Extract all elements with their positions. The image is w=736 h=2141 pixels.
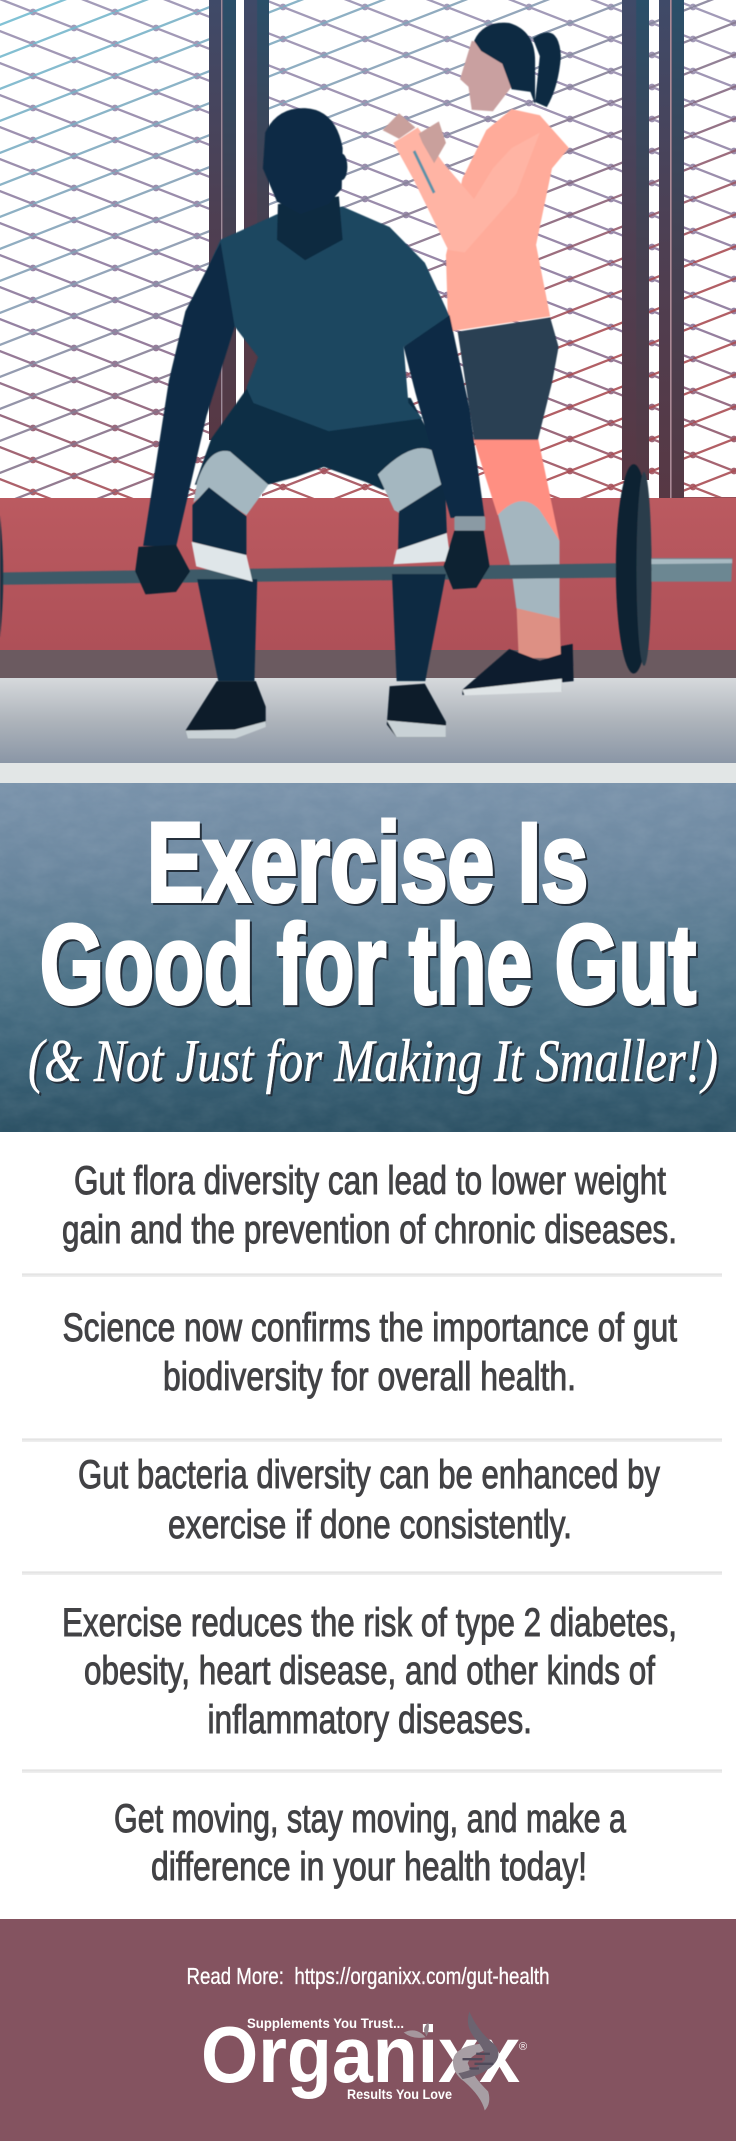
- man shorts: [195, 383, 446, 490]
- point 5: difference in your health today!: [151, 1845, 587, 1889]
- man right thigh: [378, 448, 445, 513]
- logo: Organixx: Supplements You Trust...: [247, 2016, 404, 2031]
- man calf bands: [192, 533, 451, 582]
- woman ankle: [516, 602, 561, 658]
- point 4: inflammatory diseases.: [208, 1698, 532, 1742]
- floor stripe: [0, 763, 736, 783]
- man left thigh: [193, 451, 268, 515]
- man hands: [135, 530, 490, 594]
- woman arm: [393, 128, 540, 253]
- woman leggings salmon panel: [473, 438, 560, 541]
- woman hands: [383, 113, 446, 163]
- panel: footer: [0, 1919, 736, 2141]
- read more link: Read More: https://organixx.com/gut-health: [186, 1963, 550, 1989]
- point 2: biodiversity for overall health.: [163, 1355, 576, 1399]
- woman lower leggings: [498, 501, 560, 618]
- main title: [40, 800, 696, 1027]
- man socks: [197, 574, 446, 681]
- woman back shoe: [552, 644, 574, 683]
- woman face: [460, 41, 512, 111]
- icon: DNA helix and leaf: [404, 2012, 499, 2110]
- man neck: [277, 196, 343, 260]
- window posts: [209, 0, 736, 498]
- man head: [263, 108, 343, 214]
- point 1: [62, 1159, 677, 1252]
- window mesh background: [0, 0, 736, 500]
- woman hair: [474, 23, 535, 105]
- man left arm: [143, 242, 235, 547]
- woman jacket: [446, 109, 569, 332]
- man knee wraps: [192, 482, 447, 556]
- woman front shoe: [462, 649, 562, 695]
- point 3: [78, 1453, 660, 1547]
- panel: hero photo: [0, 0, 736, 783]
- point 5: [114, 1797, 627, 1889]
- logo: Organixx: ®: [519, 2041, 527, 2053]
- ledge: [0, 650, 736, 680]
- man right arm: [404, 315, 484, 518]
- barbell: [0, 464, 732, 673]
- logo: Organixx: Results You Love: [347, 2087, 452, 2102]
- watch: [454, 516, 485, 531]
- point 4: [62, 1601, 677, 1742]
- man ear: [336, 154, 347, 180]
- floor: [0, 678, 736, 763]
- man torso: [185, 207, 450, 431]
- red wall: [0, 498, 736, 651]
- panel: title band: [0, 783, 736, 1132]
- point 2: [62, 1306, 677, 1399]
- panel: key points: [22, 1159, 722, 1889]
- man figure: [135, 108, 490, 739]
- point 3: exercise if done consistently.: [168, 1503, 572, 1547]
- man shoes: [185, 681, 446, 739]
- woman shorts: [458, 317, 559, 440]
- ponytail: [533, 32, 561, 107]
- arm band: [414, 151, 434, 193]
- logo: Organixx: Organixx: [201, 2010, 520, 2099]
- woman figure: [383, 23, 574, 695]
- main title: Exercise Is: [147, 800, 588, 925]
